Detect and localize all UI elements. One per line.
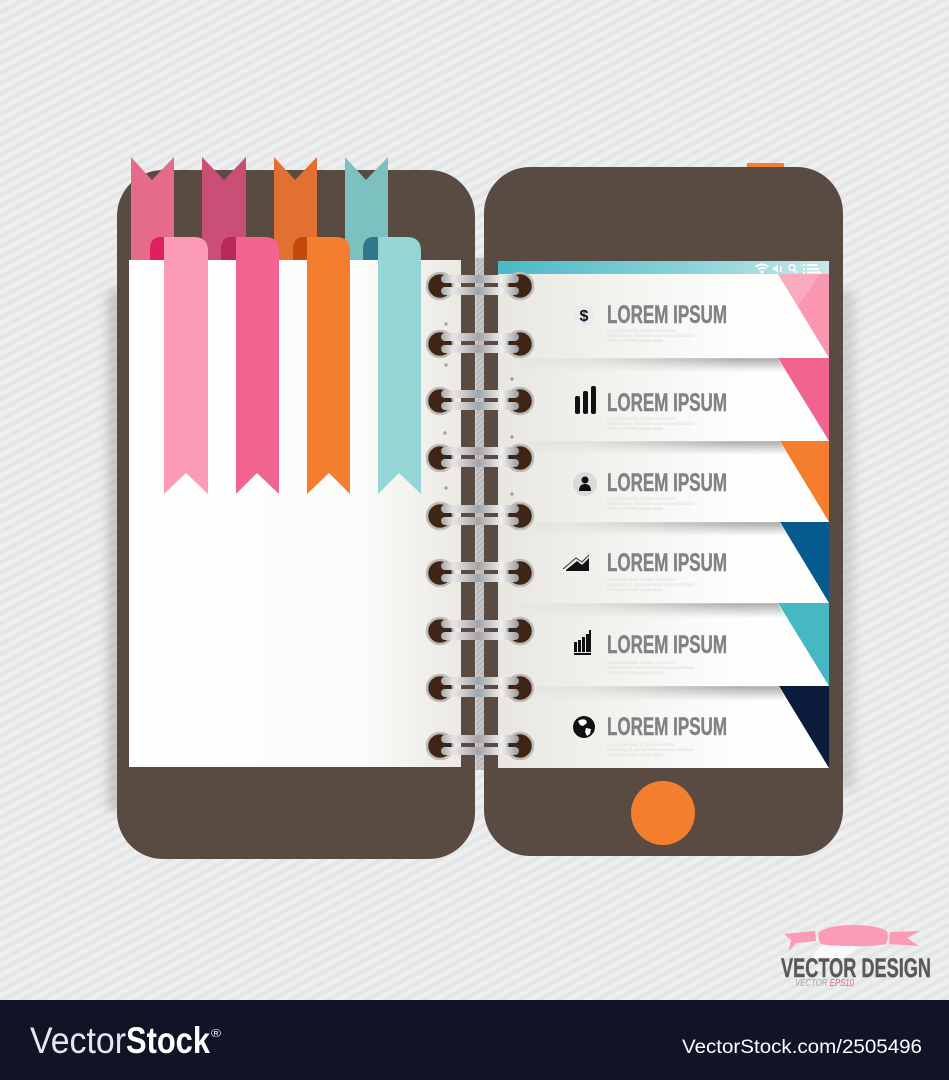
back ribbon rose	[202, 157, 246, 262]
status bar	[498, 261, 829, 275]
logo ribbon	[784, 925, 920, 951]
body text 4	[607, 577, 695, 592]
ribbon 2	[236, 237, 279, 494]
back ribbon orange	[274, 157, 317, 262]
icon: bar chart	[575, 386, 596, 414]
icon: globe	[573, 716, 595, 738]
band shadows and fold lines	[556, 358, 786, 700]
body text 5: ut labore et dolore magna aliqua	[607, 670, 663, 675]
ribbon 3 fold	[293, 237, 313, 260]
body text 2: Lorem ipsum dolor sit amet, consectetur	[607, 416, 675, 421]
logo white swoosh	[812, 946, 858, 958]
ribbon 2 fold	[221, 237, 241, 260]
body text 1: Lorem ipsum dolor sit amet, consectetur	[607, 328, 675, 333]
panel: right notebook page	[498, 261, 829, 768]
body text 2: adipisicing elit, sed do eiusmod tempor incididunt	[607, 421, 695, 426]
top orange button	[747, 163, 784, 169]
ribbon 1	[164, 237, 208, 494]
ribbon 3	[307, 237, 350, 494]
page background	[498, 274, 829, 768]
panel: left notebook page	[129, 260, 461, 767]
body text 3: adipisicing elit, sed do eiusmod tempor incididunt	[607, 501, 695, 506]
logo	[781, 925, 931, 989]
icon: person	[573, 472, 597, 496]
orange home button	[631, 781, 695, 845]
phone shadows	[108, 290, 854, 810]
icon: dollar	[573, 304, 595, 326]
band 4	[563, 522, 829, 603]
band 1	[573, 274, 829, 358]
body text 6: Lorem ipsum dolor sit amet, consectetur	[607, 742, 675, 747]
band 6	[573, 686, 829, 768]
heading 6: LOREM IPSUM	[607, 713, 727, 741]
page punch dots	[443, 322, 514, 496]
footer url: VectorStock.com/2505496	[682, 1037, 922, 1058]
body text 2: ut labore et dolore magna aliqua	[607, 426, 663, 431]
body text 6	[607, 742, 695, 757]
body text 5: Lorem ipsum dolor sit amet, consectetur	[607, 660, 675, 665]
body text 1: ut labore et dolore magna aliqua	[607, 338, 663, 343]
heading 1: LOREM IPSUM	[607, 301, 727, 329]
bookmark ribbons	[150, 237, 421, 494]
back ribbons	[131, 157, 388, 262]
ribbon 1 fold	[150, 237, 170, 260]
body text 4: adipisicing elit, sed do eiusmod tempor incididunt	[607, 582, 695, 587]
body text 5: adipisicing elit, sed do eiusmod tempor incididunt	[607, 665, 695, 670]
icon: dollar: $	[580, 308, 589, 325]
body text 3: Lorem ipsum dolor sit amet, consectetur	[607, 496, 675, 501]
panel: right phone	[484, 167, 843, 856]
spine gap	[476, 258, 484, 770]
footer brand: Stock	[126, 1020, 210, 1061]
body text 1: adipisicing elit, sed do eiusmod tempor incididunt	[607, 333, 695, 338]
back ribbon teal	[345, 157, 388, 262]
logo subtitle: VECTOR EPS10	[795, 978, 854, 989]
heading 5: LOREM IPSUM	[607, 631, 727, 659]
icon: line chart	[563, 555, 589, 571]
heading 2: LOREM IPSUM	[607, 389, 727, 417]
footer brand: Vector	[30, 1020, 126, 1061]
body text 4: ut labore et dolore magna aliqua	[607, 587, 663, 592]
footer bar	[0, 1000, 949, 1080]
body text 6: adipisicing elit, sed do eiusmod tempor incididunt	[607, 747, 695, 752]
status icons	[755, 264, 821, 274]
band 5	[574, 603, 829, 686]
body text 1	[607, 328, 695, 343]
icon: rising bars	[574, 630, 591, 655]
footer brand	[30, 1020, 221, 1061]
body text 5	[607, 660, 695, 675]
ribbon 4	[378, 237, 421, 494]
body text 3	[607, 496, 695, 511]
ribbon 4 fold	[363, 237, 383, 260]
footer brand: ®	[211, 1028, 221, 1040]
body text 4: Lorem ipsum dolor sit amet, consectetur	[607, 577, 675, 582]
heading 3: LOREM IPSUM	[607, 469, 727, 497]
panel: left phone	[117, 170, 475, 859]
spiral binding	[427, 273, 533, 759]
back ribbon pink	[131, 157, 174, 262]
body text 6: ut labore et dolore magna aliqua	[607, 752, 663, 757]
band 3	[573, 441, 829, 522]
body text 3: ut labore et dolore magna aliqua	[607, 506, 663, 511]
body text 2	[607, 416, 695, 431]
heading 4: LOREM IPSUM	[607, 549, 727, 577]
band 2	[575, 358, 829, 441]
